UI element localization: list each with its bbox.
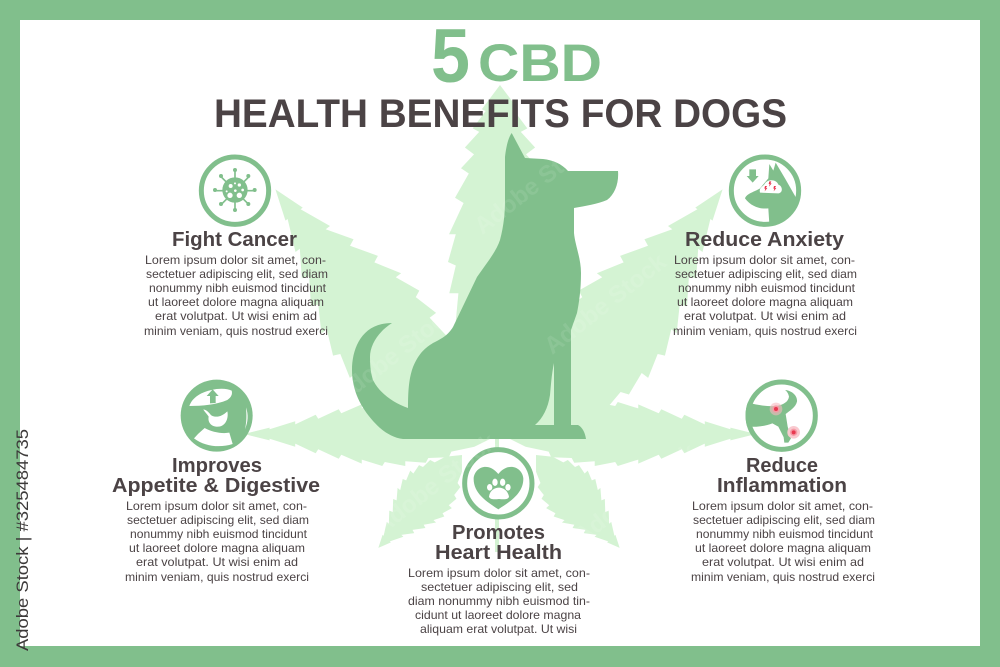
title: HEALTH BENEFITS FOR DOGS [214,92,787,136]
text block: fight cancer: minim veniam, quis nostrud exerci [144,324,328,338]
text block: reduce inflammation: nonummy nibh euismod tincidunt [696,527,874,541]
heading: improves appetite and digestive [112,455,320,497]
text block: reduce anxiety: nonummy nibh euismod tincidunt [678,281,856,295]
watermark text: Adobe Stock [569,438,702,550]
text block: improves appetite: minim veniam, quis nostrud exerci [125,570,309,584]
text block: promotes heart health: aliquam erat volutpat. Ut wisi [420,622,577,636]
text block: reduce inflammation [691,499,875,584]
watermark text: Adobe Stock [469,128,602,240]
heading: reduce inflammation: Inflammation [717,475,847,497]
text block: improves appetite: erat volutpat. Ut wisi enim ad [136,555,298,569]
watermark text: Adobe Stock [369,428,502,540]
watermark text: Adobe Stock [329,298,462,410]
text block: fight cancer: nonummy nibh euismod tincidunt [149,281,327,295]
icon: dog head (reduce anxiety) [731,157,799,224]
text block: reduce inflammation: erat volutpat. Ut wisi enim ad [702,555,864,569]
text block: improves appetite: sectetuer adipiscing elit, sed diam [127,513,309,527]
heading: fight cancer: Fight Cancer [172,229,297,251]
heading: promotes heart health [435,522,562,564]
text block: fight cancer: Lorem ipsum dolor sit amet, con- [145,253,326,267]
text block: reduce anxiety: Lorem ipsum dolor sit amet, con- [674,253,855,267]
title: CBD [478,34,602,93]
text block: reduce anxiety: ut laoreet dolore magna aliquam [677,295,853,309]
icon: heart with paw (promotes heart health) [465,450,532,517]
heading: improves appetite and digestive: Appetite & Digestive [112,475,320,497]
text block: improves appetite: nonummy nibh euismod tincidunt [130,527,308,541]
text block: promotes heart health: diam nonummy nibh euismod tin- [408,594,590,608]
heading: promotes heart health: Promotes [452,522,545,544]
text block: reduce inflammation: ut laoreet dolore magna aliquam [695,541,871,555]
text block: reduce anxiety: sectetuer adipiscing elit, sed diam [675,267,857,281]
cannabis leaf background [232,85,766,567]
text block: improves appetite [125,499,309,584]
text block: promotes heart health [408,566,590,636]
text block: fight cancer: erat volutpat. Ut wisi enim ad [155,309,317,323]
text block: fight cancer: sectetuer adipiscing elit, sed diam [146,267,328,281]
icon: stomach (improves appetite) [181,380,253,452]
text block: reduce inflammation: minim veniam, quis nostrud exerci [691,570,875,584]
text block: reduce anxiety: minim veniam, quis nostrud exerci [673,324,857,338]
text block: fight cancer [144,253,328,338]
text block: reduce inflammation: Lorem ipsum dolor sit amet, con- [692,499,873,513]
text block: promotes heart health: Lorem ipsum dolor sit amet, con- [408,566,590,580]
stock id side label: Adobe Stock | #325484735 [13,429,32,651]
heading: reduce anxiety: Reduce Anxiety [685,229,845,251]
text block: fight cancer: ut laoreet dolore magna aliquam [148,295,324,309]
heading: reduce inflammation: Reduce [746,455,818,477]
title: 5 [431,14,470,99]
text block: improves appetite: Lorem ipsum dolor sit amet, con- [126,499,307,513]
dog silhouette [352,133,618,439]
watermark text: Adobe Stock [539,248,672,360]
title [214,14,787,136]
icon: virus (fight cancer) [201,157,269,224]
heading: promotes heart health: Heart Health [435,542,562,564]
icon: dog joints (reduce inflammation) [746,382,815,449]
text block: reduce anxiety [673,253,857,338]
text block: promotes heart health: cidunt ut laoreet dolore magna [415,608,581,622]
heading: reduce inflammation [717,455,847,497]
text block: improves appetite: ut laoreet dolore magna aliquam [129,541,305,555]
text block: reduce anxiety: erat volutpat. Ut wisi enim ad [684,309,846,323]
heading: improves appetite and digestive: Improves [172,455,262,477]
watermark text [329,128,702,550]
text block: reduce inflammation: sectetuer adipiscing elit, sed diam [693,513,875,527]
text block: promotes heart health: sectetuer adipiscing elit, sed [421,580,578,594]
